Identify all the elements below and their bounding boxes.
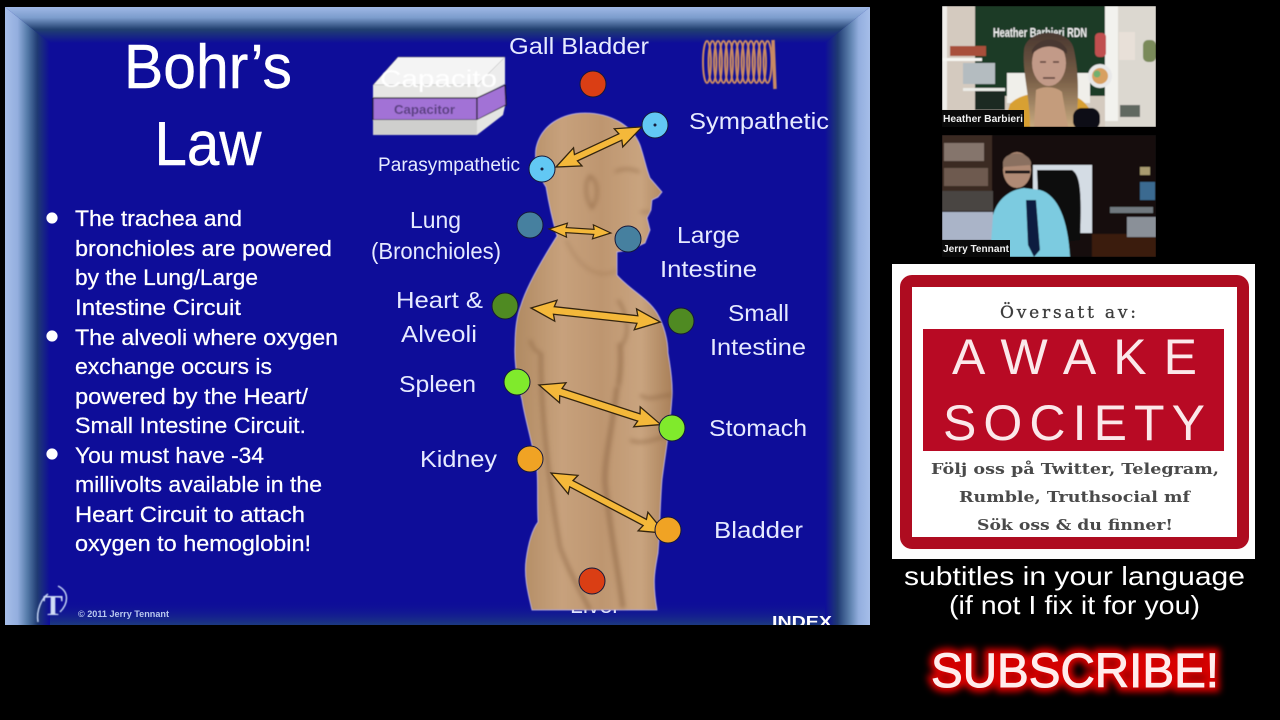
icon: capacitor: Capacito <box>380 66 497 93</box>
arrow: parasympathetic to sympathetic <box>555 126 642 168</box>
text: follow us <box>931 460 1219 534</box>
subscribe: SUBSCRIBE! <box>931 645 1219 698</box>
webcam: Heather Barbieri <box>942 6 1156 130</box>
webcam: Heather Barbieri: Heather Barbieri RDN <box>993 26 1087 40</box>
organ labels: Heart & <box>396 287 483 313</box>
organ labels: Gall Bladder <box>509 33 649 59</box>
meridian dots <box>492 71 694 594</box>
logo block: SOCIETY <box>943 395 1205 451</box>
icon: coil <box>703 40 775 89</box>
subtitles note <box>904 561 1245 620</box>
organ labels: Bladder <box>714 517 803 543</box>
text: follow us: Följ oss på Twitter, Telegram, <box>931 460 1219 478</box>
bullet list: You must have -34 <box>75 443 264 468</box>
subtitles note: subtitles in your language <box>904 561 1245 591</box>
subtitles note: (if not I fix it for you) <box>949 590 1200 620</box>
icon: capacitor: Capacitor <box>394 102 455 117</box>
organ labels: Stomach <box>709 415 807 441</box>
organ labels: Lung <box>410 207 461 233</box>
panel: Awake Society banner <box>892 264 1255 559</box>
organ labels: Sympathetic <box>689 108 829 134</box>
logo: T <box>43 591 63 622</box>
bullet list: The trachea and <box>75 206 242 231</box>
text: follow us: Sök oss & du finner! <box>977 517 1173 534</box>
organ labels: Large <box>677 222 740 248</box>
bullet list: oxygen to hemoglobin! <box>75 531 311 556</box>
title <box>128 42 290 166</box>
logo block <box>923 329 1224 451</box>
bullet list: Intestine Circuit <box>75 295 241 320</box>
organ labels: Alveoli <box>401 321 477 347</box>
organ labels: Kidney <box>420 446 498 472</box>
title: Law <box>154 110 262 179</box>
bullet list: Heart Circuit to attach <box>75 502 305 527</box>
bullet list <box>46 206 338 556</box>
text: translated by: Översatt av: <box>1000 302 1136 323</box>
bullet list: exchange occurs is <box>75 354 272 379</box>
organ labels: Spleen <box>399 371 476 397</box>
bullet list: bronchioles are powered <box>75 236 332 261</box>
arrow: heart to small intestine <box>530 298 661 332</box>
organ labels <box>371 33 829 543</box>
organ labels: Parasympathetic <box>378 155 520 176</box>
name tag: Heather Barbieri <box>943 113 1023 125</box>
bullet list: powered by the Heart/ <box>75 384 309 409</box>
copyright: © 2011 Jerry Tennant <box>78 609 169 619</box>
bullet list: millivolts available in the <box>75 472 322 497</box>
muscle shading <box>530 169 672 610</box>
icon: capacitor <box>373 57 506 135</box>
bullet list: by the Lung/Large <box>75 265 258 290</box>
webcam: Jerry Tennant <box>942 135 1156 257</box>
bullet list: The alveoli where oxygen <box>75 325 338 350</box>
organ labels: Small <box>728 300 789 326</box>
arrow: kidney to bladder <box>550 472 657 533</box>
bullet list: Small Intestine Circuit. <box>75 413 306 438</box>
arrow: lung to large intestine <box>549 222 611 240</box>
logo block: AWAKE <box>952 329 1197 385</box>
organ labels: (Bronchioles) <box>371 238 501 264</box>
index link: INDEX <box>772 614 832 631</box>
text: follow us: Rumble, Truthsocial mf <box>959 489 1192 506</box>
organ labels: Intestine <box>660 256 757 282</box>
title: Bohr’s <box>124 33 292 102</box>
arrow: spleen to stomach <box>538 382 660 428</box>
panel: slide <box>5 7 870 631</box>
name tag: Jerry Tennant <box>943 243 1009 255</box>
subscribe: SUBSCRIBE! <box>931 645 1219 698</box>
organ labels: Intestine <box>710 334 806 360</box>
logo <box>38 586 66 622</box>
human figure <box>515 113 672 610</box>
label: liver: Liver <box>570 592 620 618</box>
